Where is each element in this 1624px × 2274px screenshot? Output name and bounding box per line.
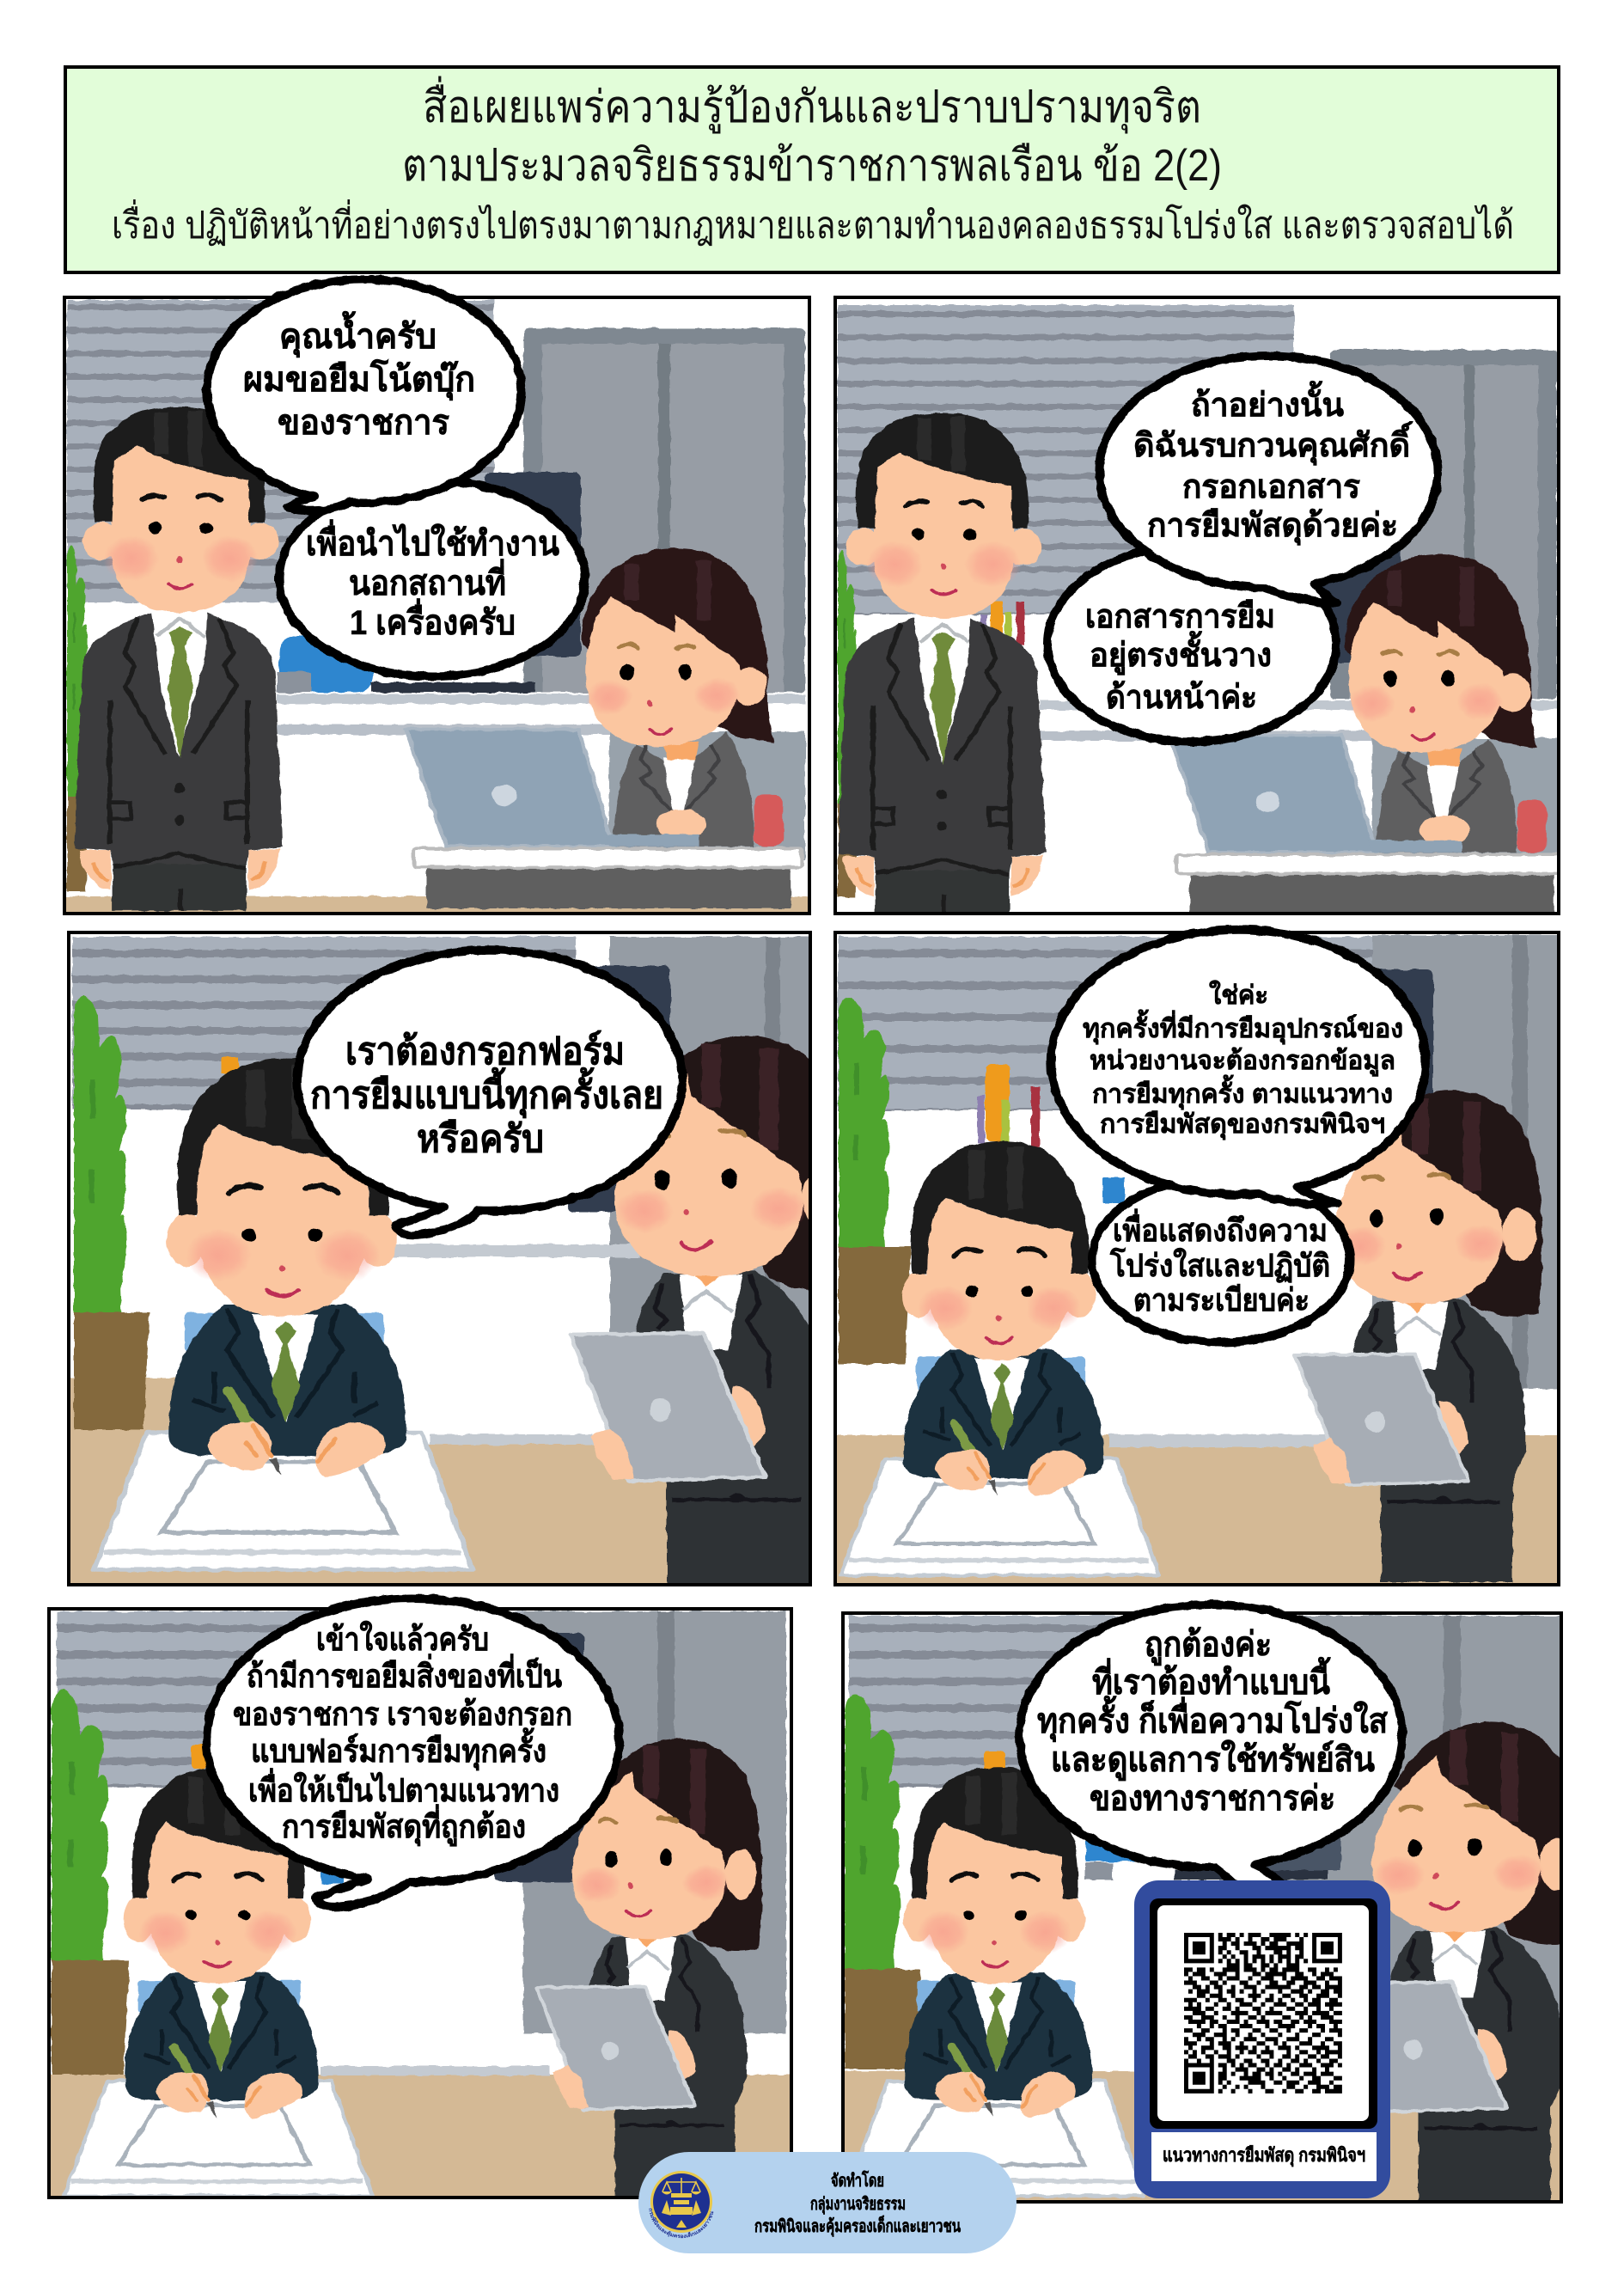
speech bubble: purpose of borrowing: เพื่อนำไปใช้ทำงาน <box>306 519 559 563</box>
speech bubble: every borrowing needs a record: ใช่ค่ะ <box>1209 980 1268 1010</box>
speech bubble: man's summary: การยืมพัสดุที่ถูกต้อง <box>282 1804 526 1847</box>
footer credit pill <box>638 2152 1017 2253</box>
panel 6: woman affirms, with QR code <box>843 1605 1580 2208</box>
speech bubble: request for notebook: ผมขอยืมโน้ตบุ๊ก <box>243 359 475 401</box>
speech bubble: purpose of borrowing: นอกสถานที่ <box>349 559 506 602</box>
panel 4: woman explains regulations <box>835 930 1559 1585</box>
speech bubble: every borrowing needs a record: การยืมพัสดุของกรมพินิจฯ <box>1100 1110 1385 1140</box>
speech bubble: purpose of borrowing <box>279 480 585 676</box>
speech bubble: purpose of borrowing: 1 เครื่องครับ <box>350 598 516 642</box>
speech bubble: every borrowing needs a record: หน่วยงานจะต้องกรอกข้อมูล <box>1090 1047 1395 1077</box>
title banner <box>65 67 1559 272</box>
speech bubble: please fill in the form: กรอกเอกสาร <box>1182 469 1361 505</box>
speech bubble: man's summary: เพื่อให้เป็นไปตามแนวทาง <box>248 1768 559 1808</box>
illustration: man writing at desk, woman with tablet <box>843 1613 1580 2208</box>
credit text <box>754 2170 961 2237</box>
panel 3: man asks if form is always needed <box>69 932 848 1591</box>
speech bubble: woman's conclusion <box>1019 1605 1402 1895</box>
credit text: กรมพินิจและคุ้มครองเด็กและเยาวชน <box>754 2215 961 2237</box>
icon: department seal: กรมพินิจและคุ้มครองเด็กและเยาวชน <box>649 2208 713 2238</box>
speech bubble: form location: เอกสารการยืม <box>1085 599 1275 635</box>
QR caption: แนวทางการยืมพัสดุ กรมพินิจฯ <box>1163 2144 1365 2167</box>
speech bubble: request for notebook <box>207 279 522 510</box>
speech bubble: please fill in the form: ถ้าอย่างนั้น <box>1191 381 1344 424</box>
speech bubble: man's summary: ถ้ามีการขอยืมสิ่งของที่เป็น <box>247 1654 562 1694</box>
speech bubble: woman's conclusion: ของทางราชการค่ะ <box>1090 1780 1335 1818</box>
speech bubble: every borrowing needs a record: การยืมทุกครั้ง ตามแนวทาง <box>1092 1074 1393 1110</box>
speech bubble: transparency: เพื่อแสดงถึงความ <box>1113 1208 1328 1248</box>
speech bubble: woman's conclusion: และดูแลการใช้ทรัพย์สิน <box>1051 1739 1375 1781</box>
speech bubble: man's summary: แบบฟอร์มการยืมทุกครั้ง <box>251 1727 546 1771</box>
speech bubble: woman's conclusion: ทุกครั้ง ก็เพื่อความโปร่งใส <box>1037 1696 1389 1743</box>
speech bubble: woman's conclusion: ที่เราต้องทำแบบนี้ <box>1092 1657 1331 1702</box>
speech bubble: question about the form: เราต้องกรอกฟอร์ม <box>345 1030 625 1073</box>
speech bubble: please fill in the form <box>1100 356 1438 603</box>
illustration: office, man standing, woman at laptop <box>835 297 1565 916</box>
speech bubble: transparency: โปร่งใสและปฏิบัติ <box>1109 1247 1330 1283</box>
title line 2: ตามประมวลจริยธรรมข้าราชการพลเรือน ข้อ 2(2) <box>402 141 1222 191</box>
speech bubble: man's summary: ของราชการ เราจะต้องกรอก <box>233 1696 572 1732</box>
panel 1: man asks to borrow a notebook <box>64 279 809 914</box>
speech bubble: request for notebook: ของราชการ <box>278 404 449 442</box>
speech bubble: transparency: ตามระเบียบค่ะ <box>1133 1282 1310 1317</box>
speech bubble: man's summary <box>207 1599 620 1907</box>
speech bubble: woman's conclusion: ถูกต้องค่ะ <box>1145 1626 1272 1666</box>
speech bubble: transparency <box>1092 1177 1350 1342</box>
credit text: จัดทำโดย <box>831 2170 884 2191</box>
speech bubble: please fill in the form: ดิฉันรบกวนคุณศักดิ์ <box>1133 421 1413 466</box>
illustration: man writing at desk, woman with tablet <box>49 1609 791 2201</box>
speech bubble: form location <box>1047 546 1336 742</box>
credit text: กลุ่มงานจริยธรรม <box>810 2195 906 2215</box>
speech bubble: form location: ด้านหน้าค่ะ <box>1106 680 1257 716</box>
icon: department seal <box>649 2171 713 2238</box>
QR code <box>1184 1933 1342 2094</box>
speech bubble: every borrowing needs a record <box>1051 930 1426 1204</box>
panel 2: woman replies about the form <box>835 297 1565 916</box>
illustration: man writing at desk, woman with tablet <box>835 932 1559 1585</box>
speech bubble: question about the form: การยืมแบบนี้ทุกครั้งเลย <box>310 1067 663 1119</box>
speech bubble: every borrowing needs a record: ทุกครั้งที่มีการยืมอุปกรณ์ของ <box>1083 1009 1403 1045</box>
QR code card <box>1134 1880 1390 2198</box>
speech bubble: question about the form <box>297 950 682 1235</box>
illustration: man writing at desk, woman with tablet <box>69 932 848 1591</box>
speech bubble: form location: อยู่ตรงชั้นวาง <box>1090 631 1272 675</box>
speech bubble: request for notebook: คุณน้ำครับ <box>279 311 437 358</box>
title line 1: สื่อเผยแพร่ความรู้ป้องกันและปราบปรามทุจริต <box>423 76 1201 134</box>
illustration: office, man standing, woman at laptop <box>64 297 809 914</box>
speech bubble: please fill in the form: การยืมพัสดุด้วยค่ะ <box>1147 508 1398 546</box>
speech bubble: question about the form: หรือครับ <box>417 1118 544 1160</box>
panel 5: man confirms understanding <box>49 1599 791 2201</box>
speech bubble: man's summary: เข้าใจแล้วครับ <box>316 1620 489 1657</box>
